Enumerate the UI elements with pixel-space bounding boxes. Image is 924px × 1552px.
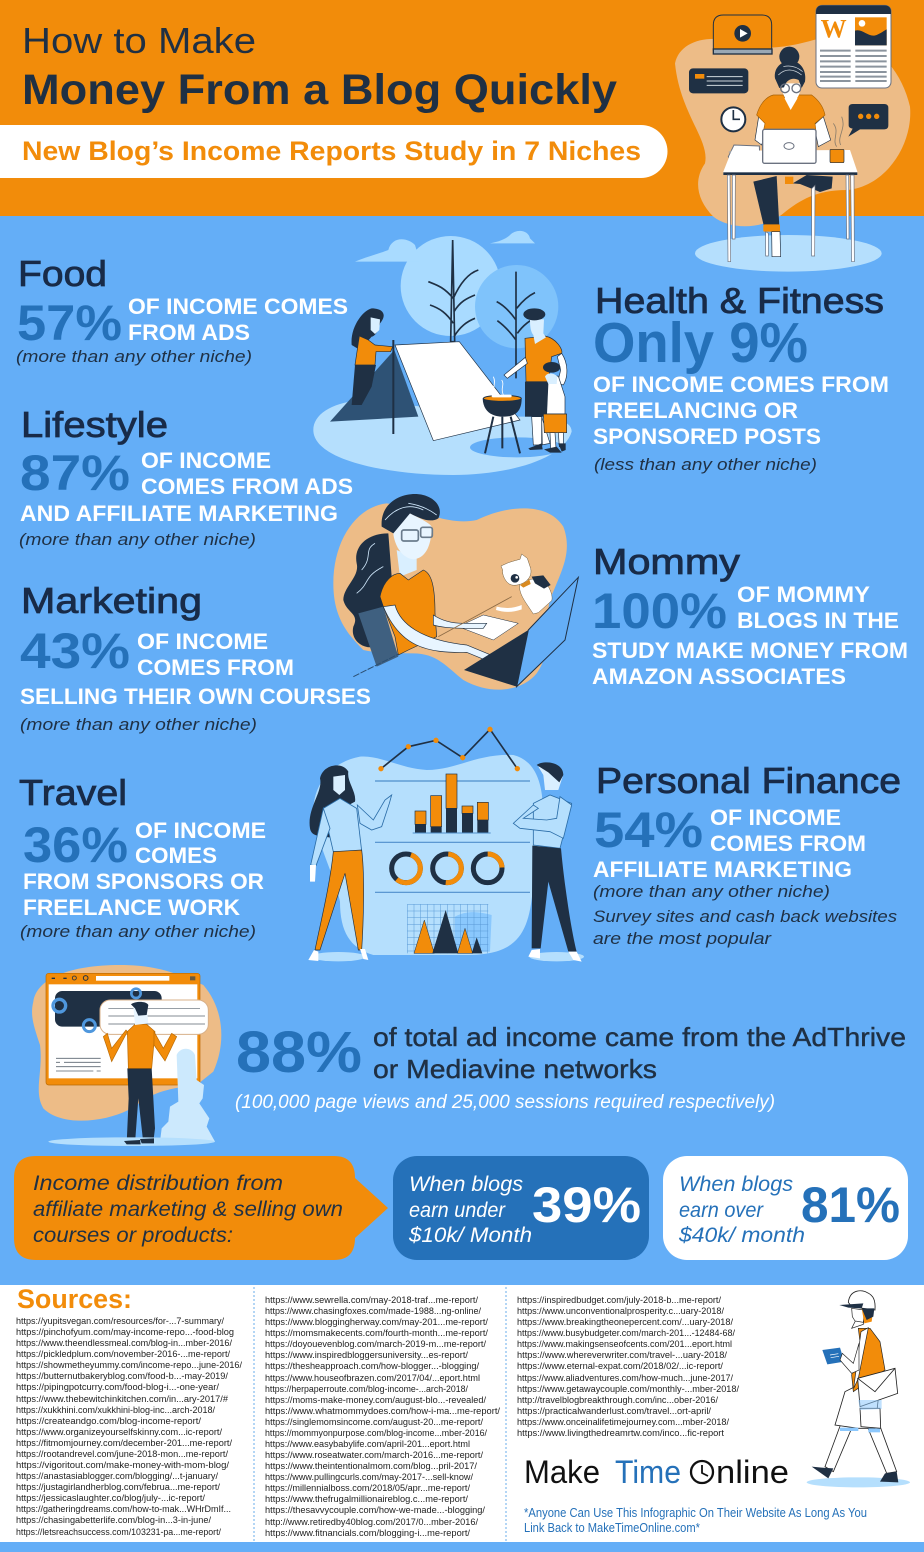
note: usage: Link Back to MakeTimeOnline.com* [524,1520,700,1535]
subtitle pill [0,125,668,178]
panel: health and fitness: (less than any other niche) [594,455,817,474]
panel: footer sources [0,1284,924,1542]
panel: travel: FREELANCE WORK [23,895,240,920]
sources column 3: https://www.whereverwriter.com/travel-...uary-2018/ [517,1350,727,1361]
sources column 2: https://www.chasingfoxes.com/made-1988...ng-online/ [265,1306,481,1317]
panel: travel: OF INCOME [135,818,266,843]
sources column 1: https://jessicaslaughter.co/blog/july-...ic-report/ [16,1493,205,1504]
panel: travel: (more than any other niche) [20,922,256,941]
sources column 1: https://butternutbakeryblog.com/food-b...-may-2019/ [16,1371,228,1382]
sources column 1: https://letsreachsuccess.com/103231-pa...me-report/ [16,1527,221,1538]
card: under 10k: $10k/ Month [408,1224,532,1247]
card: over 40k [663,1156,908,1260]
note: usage: *Anyone Can Use This Infographic On Their Website As Long As You [524,1505,867,1520]
panel: health and fitness [593,280,889,474]
card: over 40k: 81% [801,1177,900,1233]
sources column 2: https://www.theintentionalmom.com/blog...pril-2017/ [265,1461,477,1472]
sources column 2: https://millennialboss.com/2018/05/apr...me-report/ [265,1483,470,1494]
sources column 3: https://www.livingthedreamrtw.com/inco...fic-report [517,1428,724,1439]
card: under 10k: earn under [409,1199,506,1222]
sources column 1: https://pipingpotcurry.com/food-blog-i...-one-year/ [16,1382,219,1393]
sources column 2: https://mommyonpurpose.com/blog-income...mber-2016/ [265,1428,487,1439]
sources column 2: https://thesavvycouple.com/how-we-made...-blogging/ [265,1505,485,1516]
card: under 10k [393,1156,649,1260]
panel: food: Food [18,253,107,294]
illustration: couple with charts [308,727,584,962]
sources column 3: https://www.eternal-expat.com/2018/02/...ic-report/ [517,1361,723,1372]
panel: food [16,253,348,366]
panel: marketing: OF INCOME [137,629,268,654]
heading: sources: Sources: [17,1284,132,1314]
sources column 2: http://www.retiredby40blog.com/2017/0...mber-2016/ [265,1517,478,1528]
header band [0,0,924,216]
panel: lifestyle: OF INCOME [141,448,271,473]
sources column 3: https://www.unconventionalprosperity.c...uary-2018/ [517,1306,724,1317]
stat: 88 percent: or Mediavine networks [373,1054,657,1084]
sources column 2 [265,1295,500,1539]
logo: make time online: Make [524,1454,600,1490]
panel: travel: 36% [23,817,128,873]
callout: income distribution arrow: Income distribution from [33,1172,283,1195]
illustration: woman with laptop and cat [333,494,578,690]
panel: personal finance: are the most popular [593,929,773,948]
sources column 1: https://createandgo.com/blog-income-report/ [16,1416,201,1427]
sources column 3: https://www.breakingtheonepercent.com/...uary-2018/ [517,1317,733,1328]
panel: food: OF INCOME COMES [128,294,348,319]
sources column 1: https://pinchofyum.com/may-income-repo...-food-blog [16,1327,234,1338]
panel: personal finance: OF INCOME [710,805,841,830]
card: under 10k: 39% [532,1177,641,1233]
callout: income distribution arrow: affiliate marketing & selling own [33,1198,343,1221]
panel: lifestyle: 87% [20,445,130,501]
sources column 2: https://www.houseofbrazen.com/2017/04/...eport.html [265,1373,480,1384]
sources column 2: https://momsmakecents.com/fourth-month...me-report/ [265,1328,488,1339]
title line 1: How to Make [22,20,256,61]
sources column 2: https://www.fitnancials.com/blogging-i...me-report/ [265,1528,470,1539]
panel: personal finance: Personal Finance [596,760,901,801]
stat: 88 percent: of total ad income came from the AdThrive [373,1022,906,1052]
panel: lifestyle: Lifestyle [21,404,168,445]
panel: mommy: STUDY MAKE MONEY FROM [592,638,908,663]
stat: 88 percent [235,1020,906,1113]
panel: marketing: SELLING THEIR OWN COURSES [20,684,371,709]
note: usage [524,1505,867,1535]
illustration: walking man [807,1291,910,1487]
sources column 1: https://fitmomjourney.com/december-201...me-report/ [16,1438,232,1449]
sources column 1: https://rootandrevel.com/june-2018-mon...me-report/ [16,1449,228,1460]
sources column 2: https://herpaperroute.com/blog-income-...arch-2018/ [265,1384,468,1395]
sources column 2: https://www.inspiredbloggersuniversity...es-report/ [265,1350,468,1361]
panel: health and fitness: Health & Fitness [595,280,884,321]
panel: personal finance: Survey sites and cash back websites [593,907,898,926]
panel: personal finance: 54% [594,802,703,858]
panel: mommy: 100% [592,583,727,639]
sources column 3: https://www.aliadventures.com/how-much...june-2017/ [517,1373,733,1384]
sources column 1: https://showmetheyummy.com/income-repo...june-2016/ [16,1360,242,1371]
panel: travel: Travel [19,772,127,813]
subtitle pill: New Blog’s Income Reports Study in 7 Niches [22,136,641,166]
sources column 3: https://www.getawaycouple.com/monthly-...mber-2018/ [517,1384,739,1395]
panel: marketing: Marketing [21,580,202,621]
panel: marketing: COMES FROM [137,655,294,680]
sources column 1: https://justagirlandherblog.com/februa...me-report/ [16,1482,220,1493]
panel: mommy [592,541,908,689]
panel: mommy: AMAZON ASSOCIATES [592,664,846,689]
sources column 3: https://www.onceinalifetimejourney.com...mber-2018/ [517,1417,729,1428]
sources column 3: https://www.busybudgeter.com/march-201...-12484-68/ [517,1328,735,1339]
sources column 2: https://www.easybabylife.com/april-201...eport.html [265,1439,470,1450]
logo: make time online: nline [716,1454,789,1490]
sources column 1: https://anastasiablogger.com/blogging/...t-january/ [16,1471,218,1482]
illustration: man at browser window [32,965,221,1146]
panel: lifestyle: (more than any other niche) [19,530,256,549]
stat: 88 percent: (100,000 page views and 25,000 sessions required respectively) [235,1092,775,1113]
logo: make time online: Time [615,1454,681,1490]
panel: health and fitness: SPONSORED POSTS [593,424,821,449]
panel: travel: COMES [135,843,217,868]
sources column 3: https://inspiredbudget.com/july-2018-b...me-report/ [517,1295,721,1306]
panel: food: FROM ADS [128,320,250,345]
sources column 2: https://www.whatmommydoes.com/how-i-ma...me-report/ [265,1406,500,1417]
sources column 3: https://www.makingsenseofcents.com/201...eport.html [517,1339,732,1350]
stat: 88 percent: 88% [236,1020,362,1085]
panel: health and fitness: Only 9% [593,311,808,375]
panel: travel: FROM SPONSORS OR [23,869,264,894]
illustration: woman blogging at desk [675,5,910,272]
panel: food: (more than any other niche) [16,347,252,366]
panel: travel [19,772,266,941]
panel: personal finance: COMES FROM [710,831,866,856]
panel: mommy: BLOGS IN THE [737,608,899,633]
panel: food: 57% [17,295,122,351]
panel: health and fitness: FREELANCING OR [593,398,798,423]
panel: lifestyle: COMES FROM ADS [141,474,353,499]
sources column 1: https://yupitsvegan.com/resources/for-...7-summary/ [16,1316,224,1327]
panel: health and fitness: OF INCOME COMES FROM [593,372,889,397]
sources column 1 [16,1316,242,1538]
card: under 10k: When blogs [409,1173,524,1196]
sources column 2: https://www.thefrugalmillionaireblog.c...me-report/ [265,1494,468,1505]
sources column 1: https://chasingabetterlife.com/blog-in...3-in-june/ [16,1515,211,1526]
panel: lifestyle: AND AFFILIATE MARKETING [20,501,338,526]
panel: marketing: 43% [20,623,130,679]
card: over 40k: earn over [679,1199,764,1222]
card: over 40k: When blogs [679,1173,794,1196]
logo: make time online [524,1454,789,1490]
sources column 2: https://www.sewrella.com/may-2018-traf...me-report/ [265,1295,478,1306]
panel: personal finance: AFFILIATE MARKETING [593,857,852,882]
sources column 3: http://travelblogbreakthrough.com/inc...ober-2016/ [517,1395,718,1406]
panel: marketing [20,580,371,734]
sources column 2: https://www.pullingcurls.com/may-2017-...sell-know/ [265,1472,473,1483]
panel: mommy: OF MOMMY [737,582,870,607]
callout: income distribution arrow: courses or products: [33,1224,233,1247]
panel: marketing: (more than any other niche) [20,715,257,734]
sources column 3 [517,1295,739,1439]
sources column 2: https://doyouevenblog.com/march-2019-m...me-report/ [265,1339,486,1350]
sources column 1: https://www.organizeyourselfskinny.com...ic-report/ [16,1427,222,1438]
sources column 1: https://gatheringdreams.com/how-to-mak...WHrDmIf... [16,1504,231,1515]
panel: personal finance [593,760,901,948]
illustration: woman blogging at desk: W [821,14,847,43]
panel: personal finance: (more than any other niche) [593,882,830,901]
title line 2: Money From a Blog Quickly [22,66,617,114]
sources column 1: https://vigoritout.com/make-money-with-mom-blog/ [16,1460,229,1471]
sources column 2: https://singlemomsincome.com/august-20...me-report/ [265,1417,483,1428]
sources column 1: https://xukkhini.com/xukkhini-blog-inc...arch-2018/ [16,1405,215,1416]
sources column 2: https://www.roseatwater.com/march-2016...me-report/ [265,1450,483,1461]
sources column 1: https://www.theendlessmeal.com/blog-in...mber-2016/ [16,1338,232,1349]
illustration: family camping [313,231,572,475]
sources column 1: https://pickledplum.com/november-2016-...me-report/ [16,1349,230,1360]
sources column 2: https://thesheapproach.com/how-blogger...-blogging/ [265,1361,479,1372]
sources column 3: https://practicalwanderlust.com/travel...ort-april/ [517,1406,711,1417]
sources column 1: https://www.thebewitchinkitchen.com/in...ary-2017/# [16,1394,229,1405]
card: over 40k: $40k/ month [678,1224,805,1247]
panel: mommy: Mommy [593,541,740,582]
sources column 2: https://www.bloggingherway.com/may-201...me-report/ [265,1317,488,1328]
panel: lifestyle [19,404,353,549]
callout: income distribution arrow [14,1156,388,1260]
sources column 2: https://moms-make-money.com/august-blo...-revealed/ [265,1395,486,1406]
